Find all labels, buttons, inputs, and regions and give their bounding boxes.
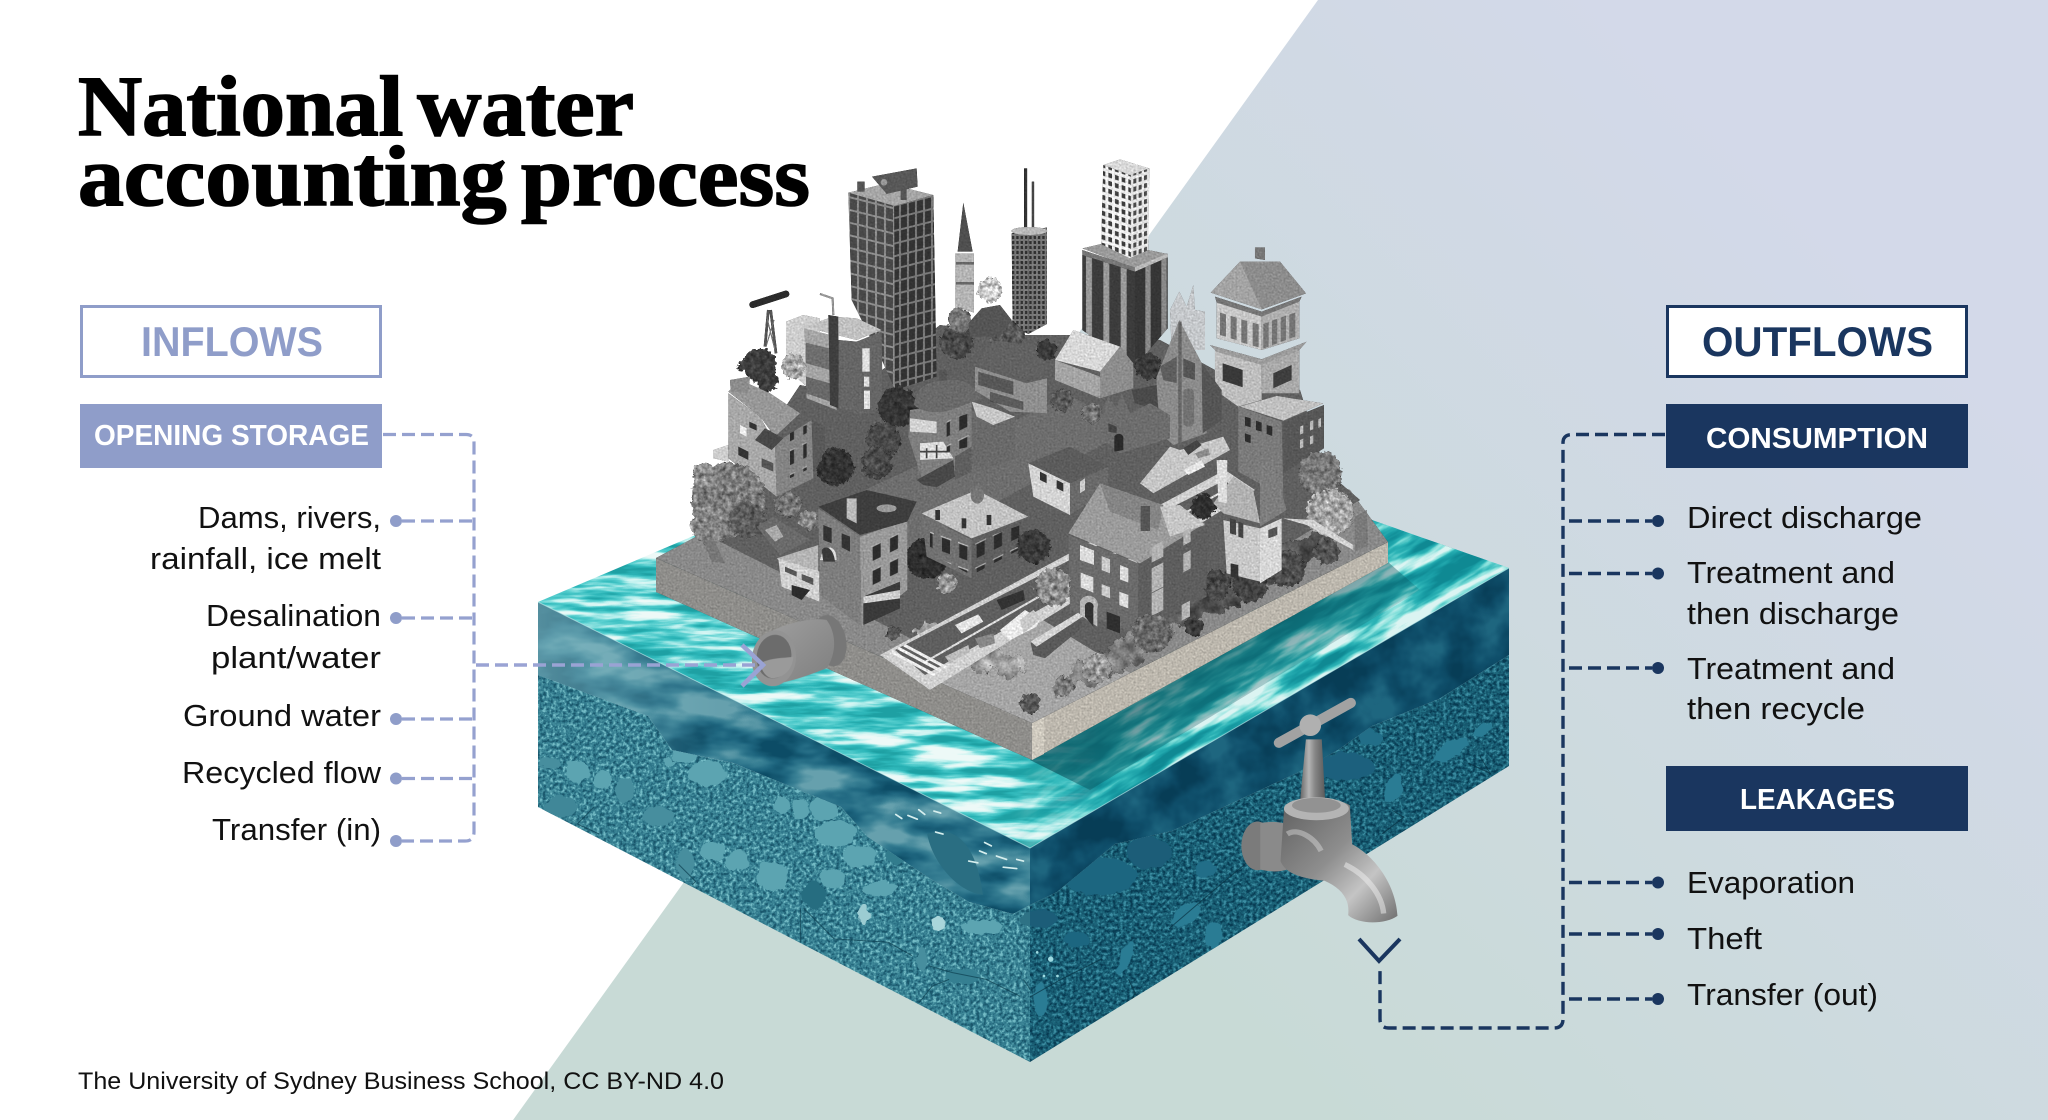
background: diagonal tinted panel [513,0,2048,1120]
leakages list: Evaporation [1687,865,1855,900]
spire tower [955,203,974,313]
back-right skyline [1028,159,1352,528]
panel: outflows [1359,306,1968,1028]
illustration: miniature city in greyscale [656,159,1388,723]
slab left face [656,558,1032,760]
outflow connectors [1380,434,1665,1028]
ground plane [656,372,1388,723]
outflow bullets [1652,515,1664,1005]
road vehicles [945,590,1040,663]
ground street grid [800,395,1130,560]
mansion front shrubs [1017,495,1227,713]
inflow list [150,500,382,847]
left house [713,377,825,497]
cluster trees [775,355,918,517]
consumption list: Treatment and [1687,555,1895,590]
narrow brick block [818,490,917,627]
consumption list: Treatment and [1687,651,1895,686]
left face rock strata [538,675,1030,1062]
slab right face [1032,542,1388,760]
title: National water [78,58,634,154]
panel: inflows [80,306,763,847]
parked bus [1020,610,1083,658]
roadside shrub [887,573,957,640]
crane [753,294,833,353]
underwater boulder and fish [896,810,1023,895]
low shop [777,545,819,602]
leakages label: LEAKAGES [1740,784,1895,816]
source credit: The University of Sydney Business School, CC BY-ND 4.0 [78,1068,724,1095]
consumption list: then recycle [1687,691,1865,726]
opening storage label: OPENING STORAGE [94,420,369,452]
inflow list: plant/water [211,640,381,675]
top edge highlight [538,568,1509,848]
backdrop mass behind buildings [703,325,1360,700]
inflows heading: INFLOWS [141,318,323,365]
back-left skyline (zoom coordinates scale) [713,168,1047,517]
title: accounting process [78,128,810,224]
flat-roof townhouse [922,486,1028,578]
inflow list: Transfer (in) [212,812,381,847]
inflows heading [82,306,380,376]
gothic gatehouse [1103,385,1170,453]
inflow bullets [390,515,402,847]
consumption list: then discharge [1687,596,1899,631]
gothic church [1157,320,1222,445]
illustration: concrete slab [656,542,1388,760]
inflow list: Ground water [183,698,381,733]
white gothic house [1213,460,1287,583]
small hip-roof house [1028,447,1108,515]
consumption label [1666,404,1968,468]
front-right blocks [1017,460,1368,713]
illustration: isometric water block [538,520,1509,1062]
opening storage label [80,404,382,468]
tall glass tower [848,168,937,390]
left face stones [540,747,1046,1040]
consumption list: Direct discharge [1687,500,1922,535]
outbuilding wall [1283,510,1368,552]
front-left blocks [691,447,1040,663]
white gable house [1055,330,1133,398]
tree trunk plot [703,517,810,563]
white tower [1101,159,1149,258]
icon: faucet [1241,703,1397,922]
icon: inflow pipe [748,612,851,689]
big left tree [691,463,766,544]
leakages label [1666,766,1968,831]
leakages list [1687,865,1878,1012]
inflow list: Dams, rivers, [198,500,381,535]
left face water band [538,602,1030,914]
leakages list: Theft [1687,921,1762,956]
ground lawn front [900,600,1130,723]
ground darker shrubs [909,517,1346,696]
hex brick building [786,315,883,415]
large brick mansion [1068,483,1207,634]
small trees [778,447,947,579]
back tree and houses [940,278,1023,358]
rear side garden [1203,490,1353,602]
square corner building [1238,396,1324,497]
crane tree [737,348,778,391]
garden tree [1037,340,1161,423]
water surface right [1014,520,1508,848]
inflow list: Recycled flow [182,755,382,790]
inflow list: rainfall, ice melt [150,541,381,576]
arrow: into pipe [476,645,763,686]
dome building [908,370,1015,487]
title [78,58,810,224]
arrow: from faucet [1359,939,1400,961]
black glass tower [1082,244,1168,368]
side tree [1298,452,1352,528]
far church steeple [1170,285,1205,350]
leakages list: Transfer (out) [1687,977,1878,1012]
outflows heading: OUTFLOWS [1702,318,1933,365]
inflow list: Desalination [206,598,381,633]
water surface left [538,520,1509,848]
mansard tower [1210,247,1307,407]
consumption list [1687,500,1922,726]
right face stones [1012,720,1495,1017]
inflow connectors [383,434,474,841]
twin antenna tower [1011,168,1047,334]
outflows heading [1668,306,1966,376]
road with crossing [880,470,1255,690]
right face rock strata [1020,650,1520,1070]
manor house [975,341,1047,413]
right face water band [1030,568,1509,905]
sidewalk and cars [1140,437,1230,493]
consumption label: CONSUMPTION [1706,423,1928,455]
